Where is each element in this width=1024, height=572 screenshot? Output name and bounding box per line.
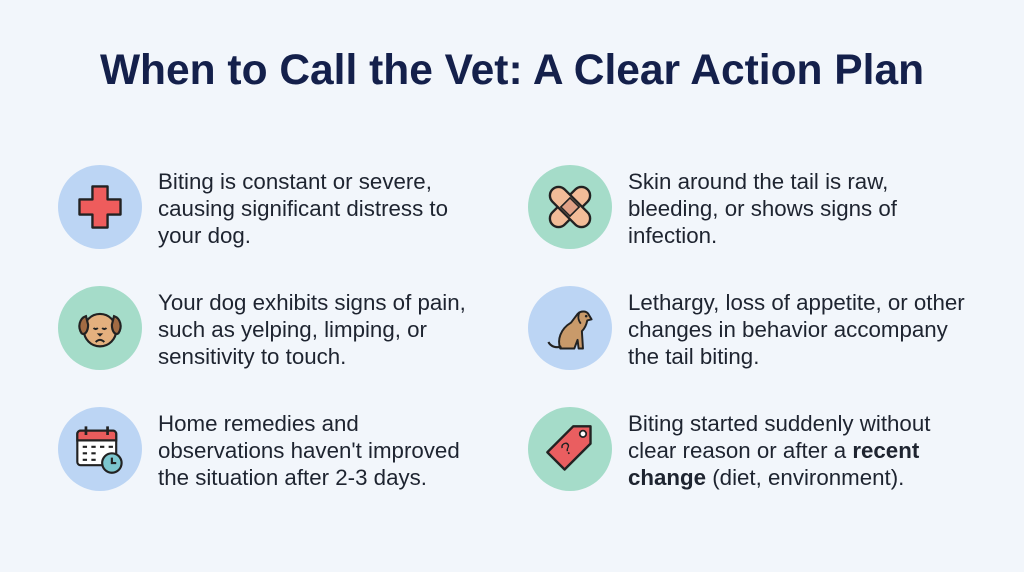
item: severe biting [58, 165, 448, 249]
text: Your dog exhibits signs of pain, such as yelping, limping, or sensitivity to touch. [158, 290, 466, 369]
item: remedies [58, 407, 460, 491]
icon: question tag: ? [557, 437, 576, 460]
icon: sitting dog [528, 286, 612, 370]
item: lethargy [528, 286, 965, 370]
icon: calendar clock [58, 407, 142, 491]
icon: question tag [528, 407, 612, 491]
icon: medical cross [58, 165, 142, 249]
icon: bandage [528, 165, 612, 249]
item: sudden start [528, 407, 930, 491]
text: Biting is constant or severe, causing significant distress to your dog. [158, 169, 448, 248]
text: Home remedies and observations haven't improved the situation after 2-3 days. [158, 411, 460, 490]
item: skin [528, 165, 897, 249]
icon: sad dog face [58, 286, 142, 370]
text: Lethargy, loss of appetite, or other changes in behavior accompany the tail biting. [628, 290, 965, 369]
text: Skin around the tail is raw, bleeding, or shows signs of infection. [628, 169, 897, 248]
item: pain [58, 286, 466, 370]
text: Biting started suddenly without clear reason or after a recent change (diet, environment). [628, 411, 930, 490]
title: When to Call the Vet: A Clear Action Plan [100, 47, 924, 94]
